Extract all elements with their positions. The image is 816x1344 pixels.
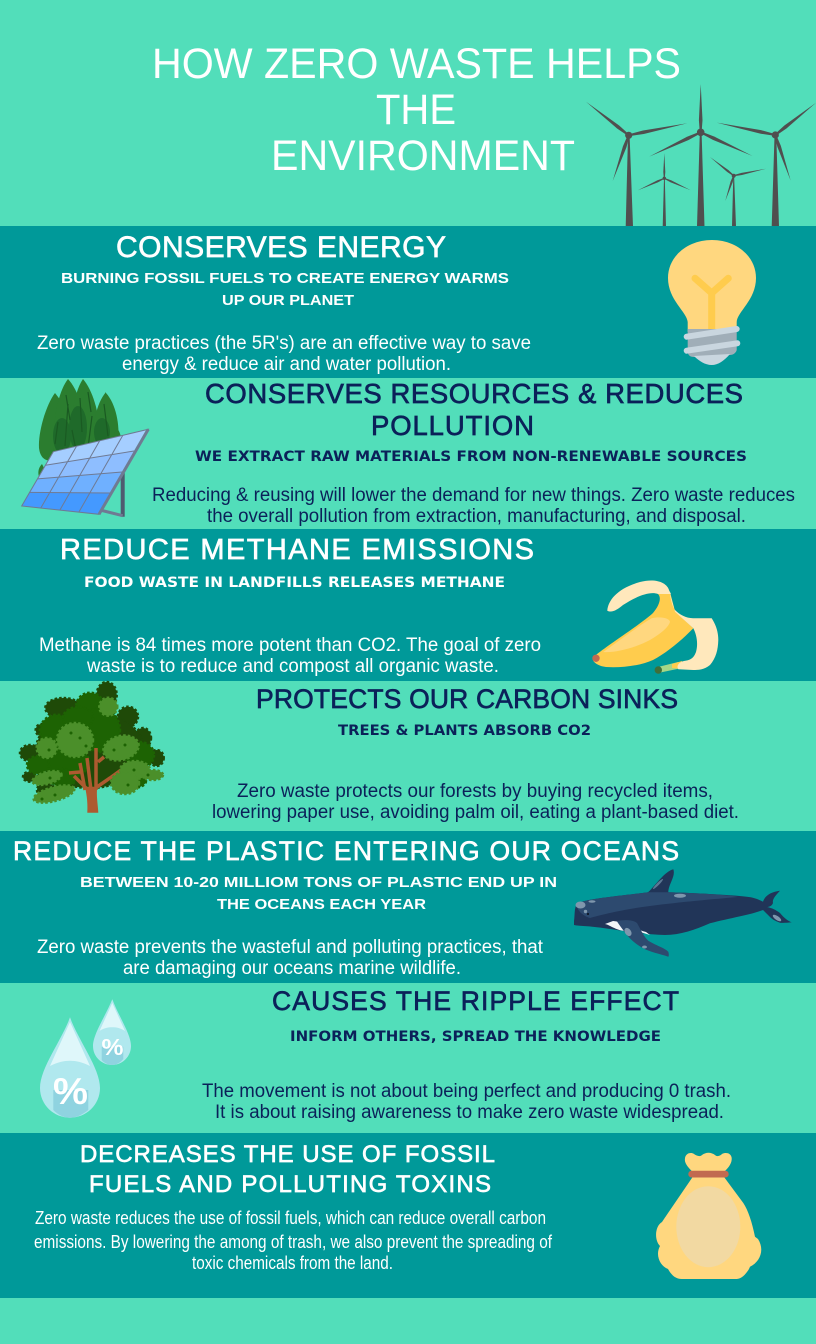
body text xyxy=(37,333,531,375)
icon: sack xyxy=(656,1153,761,1279)
icon: big drop: % xyxy=(53,1071,88,1112)
subheading xyxy=(80,875,557,913)
body text: emissions. By lowering the among of trash, we also prevent the spreading of xyxy=(34,1232,553,1252)
subheading: INFORM OTHERS, SPREAD THE KNOWLEDGE xyxy=(290,1029,661,1045)
subheading: BETWEEN 10-20 MILLIOM TONS OF PLASTIC END UP IN xyxy=(80,875,557,891)
subheading: TREES & PLANTS ABSORB CO2 xyxy=(338,723,591,739)
panel: header xyxy=(0,0,816,226)
heading: DECREASES THE USE OF FOSSIL xyxy=(80,1141,495,1168)
icon: big drop xyxy=(40,1017,100,1118)
subheading: WE EXTRACT RAW MATERIALS FROM NON-RENEWABLE SOURCES xyxy=(195,449,747,465)
heading xyxy=(80,1141,495,1198)
tree trunk xyxy=(69,748,121,813)
icon: banana xyxy=(592,580,718,674)
icon: tree xyxy=(20,682,164,813)
heading xyxy=(205,378,743,441)
body text xyxy=(202,1081,731,1123)
heading: PROTECTS OUR CARBON SINKS xyxy=(256,684,678,714)
body text: Zero waste practices (the 5R's) are an effective way to save xyxy=(37,333,531,354)
heading: CONSERVES ENERGY xyxy=(116,231,446,264)
title: THE xyxy=(376,86,456,134)
body text xyxy=(152,485,795,527)
subheading: THE OCEANS EACH YEAR xyxy=(217,897,427,913)
title xyxy=(152,40,681,180)
panel: fossil fuels and toxins xyxy=(0,1133,816,1298)
subheading: UP OUR PLANET xyxy=(222,293,354,309)
panel: reduce methane xyxy=(0,529,816,681)
body text: waste is to reduce and compost all organic waste. xyxy=(86,656,499,677)
body text: toxic chemicals from the land. xyxy=(192,1253,393,1273)
heading: FUELS AND POLLUTING TOXINS xyxy=(89,1171,491,1198)
heading: POLLUTION xyxy=(371,410,534,441)
body text: energy & reduce air and water pollution. xyxy=(122,354,451,375)
icon: light bulb xyxy=(668,240,756,365)
title: HOW ZERO WASTE HELPS xyxy=(152,40,681,88)
panel: conserves energy xyxy=(0,226,816,378)
heading: REDUCE THE PLASTIC ENTERING OUR OCEANS xyxy=(13,836,679,866)
icon: small drop: % xyxy=(102,1034,124,1060)
heading: REDUCE METHANE EMISSIONS xyxy=(60,534,534,566)
body text: lowering paper use, avoiding palm oil, eating a plant-based diet. xyxy=(212,802,739,823)
panel: carbon sinks xyxy=(0,681,816,831)
icon: solar panel xyxy=(22,429,148,517)
body text xyxy=(212,781,739,823)
icon: small drop xyxy=(93,999,131,1065)
subheading: FOOD WASTE IN LANDFILLS RELEASES METHANE xyxy=(84,575,505,591)
icon: wind turbines xyxy=(585,84,816,226)
panel: plastic in oceans xyxy=(0,831,816,983)
body text: Methane is 84 times more potent than CO2. The goal of zero xyxy=(39,635,541,656)
subheading: BURNING FOSSIL FUELS TO CREATE ENERGY WARMS xyxy=(61,271,509,287)
subheading xyxy=(61,271,509,309)
body text xyxy=(37,937,544,979)
body text: The movement is not about being perfect and producing 0 trash. xyxy=(202,1081,731,1102)
heading: CAUSES THE RIPPLE EFFECT xyxy=(272,986,679,1016)
body text xyxy=(39,635,541,677)
body text: Zero waste protects our forests by buying recycled items, xyxy=(237,781,713,802)
title: ENVIRONMENT xyxy=(271,132,575,180)
body text: the overall pollution from extraction, manufacturing, and disposal. xyxy=(207,506,746,527)
heading: CONSERVES RESOURCES & REDUCES xyxy=(205,378,743,409)
body text: It is about raising awareness to make zero waste widespread. xyxy=(215,1102,724,1123)
body text: Reducing & reusing will lower the demand for new things. Zero waste reduces xyxy=(152,485,795,506)
panel: ripple effect xyxy=(0,983,816,1133)
panel: conserves resources xyxy=(0,378,816,529)
body text: are damaging our oceans marine wildlife. xyxy=(123,958,461,979)
body text xyxy=(34,1208,553,1273)
icon: trees xyxy=(38,379,121,478)
icon: whale xyxy=(574,869,792,957)
body text: Zero waste prevents the wasteful and polluting practices, that xyxy=(37,937,544,958)
body text: Zero waste reduces the use of fossil fuels, which can reduce overall carbon xyxy=(35,1208,546,1228)
